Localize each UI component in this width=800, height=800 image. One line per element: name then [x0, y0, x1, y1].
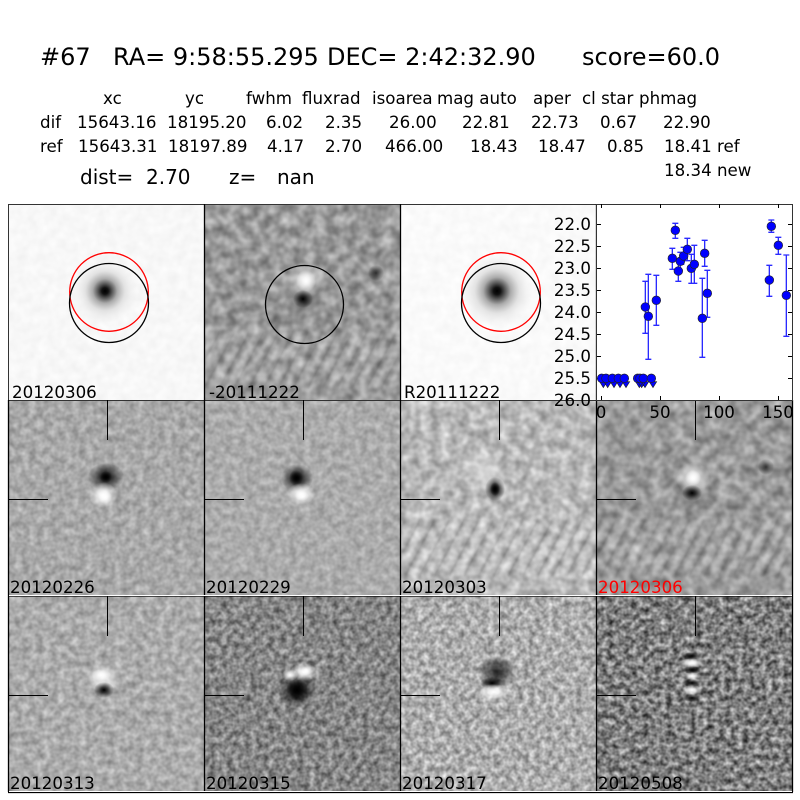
light curve chart [554, 204, 794, 422]
panel date labels: 20120317 [402, 774, 487, 793]
y axis labels: 25.5 [554, 369, 591, 388]
table row: ref: 0.85 [607, 137, 644, 156]
table header row: fluxrad [302, 89, 361, 108]
table header row [103, 89, 697, 108]
y axis labels: 22.5 [554, 237, 591, 256]
table header row: xc [103, 89, 122, 108]
panel: 20120306 difference [597, 401, 792, 595]
y axis labels [554, 215, 591, 410]
table row: ref: 4.17 [267, 137, 304, 156]
panel date labels: R20111222 [404, 383, 500, 402]
table row: dif [40, 113, 711, 132]
new magnitude: 18.34 new [664, 161, 751, 180]
distance and redshift line: 2.70 [146, 165, 191, 189]
object title line: DEC= 2:42:32.90 [327, 43, 536, 71]
panel date labels: 20120229 [206, 578, 291, 597]
distance and redshift line: dist= [80, 165, 133, 189]
y axis labels: 25.0 [554, 347, 591, 366]
table row: ref: 2.70 [325, 137, 362, 156]
panel date labels: 20120303 [402, 578, 487, 597]
table row: dif: 6.02 [266, 113, 303, 132]
table row: dif: 18195.20 [167, 113, 246, 132]
table row: dif: 26.00 [389, 113, 437, 132]
y axis labels: 26.0 [554, 391, 591, 410]
panel date labels: 20120306 [598, 578, 683, 597]
distance and redshift line: nan [277, 165, 315, 189]
measurement table [40, 89, 751, 180]
panel: 20120226 [9, 401, 204, 595]
table row: ref [40, 137, 741, 156]
y axis labels: 24.0 [554, 303, 591, 322]
y axis labels: 23.0 [554, 259, 591, 278]
table row: ref: 15643.31 [78, 137, 157, 156]
panel date labels: 20120226 [10, 578, 95, 597]
table row: dif: 15643.16 [77, 113, 156, 132]
panel: 20120508 [597, 596, 792, 791]
y axis labels: 22.0 [554, 215, 591, 234]
aperture circles: reference image [462, 253, 540, 342]
table row: dif: 2.35 [325, 113, 362, 132]
table header row: fwhm [246, 89, 292, 108]
error bars [642, 220, 789, 359]
table header row: phmag [639, 89, 697, 108]
aperture circles: new image [70, 253, 148, 342]
table header row: mag auto [437, 89, 517, 108]
table header row: isoarea [372, 89, 433, 108]
panel date labels: 20120306 [12, 383, 97, 402]
table header row: cl star [582, 89, 633, 108]
panel date labels [10, 383, 683, 793]
table row: ref: 18197.89 [168, 137, 247, 156]
table row: dif: 22.81 [462, 113, 510, 132]
panel: 20120317 [401, 596, 596, 791]
table row: dif: dif [40, 113, 62, 132]
table row: dif: 22.73 [531, 113, 579, 132]
panel: 20120313 [9, 596, 204, 791]
panel date labels: -20111222 [209, 383, 300, 402]
panel: 20120315 [205, 596, 400, 791]
table row: ref: 18.43 [470, 137, 518, 156]
panel date labels: 20120315 [206, 774, 291, 793]
chart background [597, 205, 792, 400]
crosshair markers [8, 400, 696, 696]
x axis labels: 50 [649, 403, 671, 422]
panel: difference image -20111222 [205, 205, 400, 400]
distance and redshift line: z= [229, 165, 256, 189]
panel: 20120303 [401, 401, 596, 595]
panel: 20120229 [205, 401, 400, 595]
y axis labels: 23.5 [554, 281, 591, 300]
panel: reference image R20111222 [402, 224, 595, 400]
table header row: aper [533, 89, 571, 108]
panel: new image 20120306 [9, 205, 204, 400]
y axis labels: 24.5 [554, 325, 591, 344]
table row: dif: 22.90 [663, 113, 711, 132]
object title line: score=60.0 [582, 43, 720, 71]
table row: ref: ref [40, 137, 64, 156]
x axis labels: 150 [762, 403, 794, 422]
distance and redshift line [80, 165, 315, 189]
panel frames [8, 204, 793, 792]
table row: ref: 18.41 ref [664, 137, 741, 156]
object title line: #67 [40, 43, 91, 71]
panel date labels: 20120313 [10, 774, 95, 793]
object title line: RA= 9:58:55.295 [113, 43, 319, 71]
table row: ref: 466.00 [385, 137, 443, 156]
data points [641, 222, 791, 323]
upper limit markers [597, 374, 657, 388]
aperture circle: difference image [266, 266, 344, 344]
x axis labels: 0 [596, 403, 606, 422]
table header row: yc [185, 89, 204, 108]
x axis labels: 100 [703, 403, 735, 422]
object title line [40, 43, 720, 71]
chart frame and ticks [596, 204, 792, 400]
table row: dif: 0.67 [600, 113, 637, 132]
table row: ref: 18.47 [538, 137, 586, 156]
x axis labels [596, 403, 794, 422]
panel date labels: 20120508 [598, 774, 683, 793]
